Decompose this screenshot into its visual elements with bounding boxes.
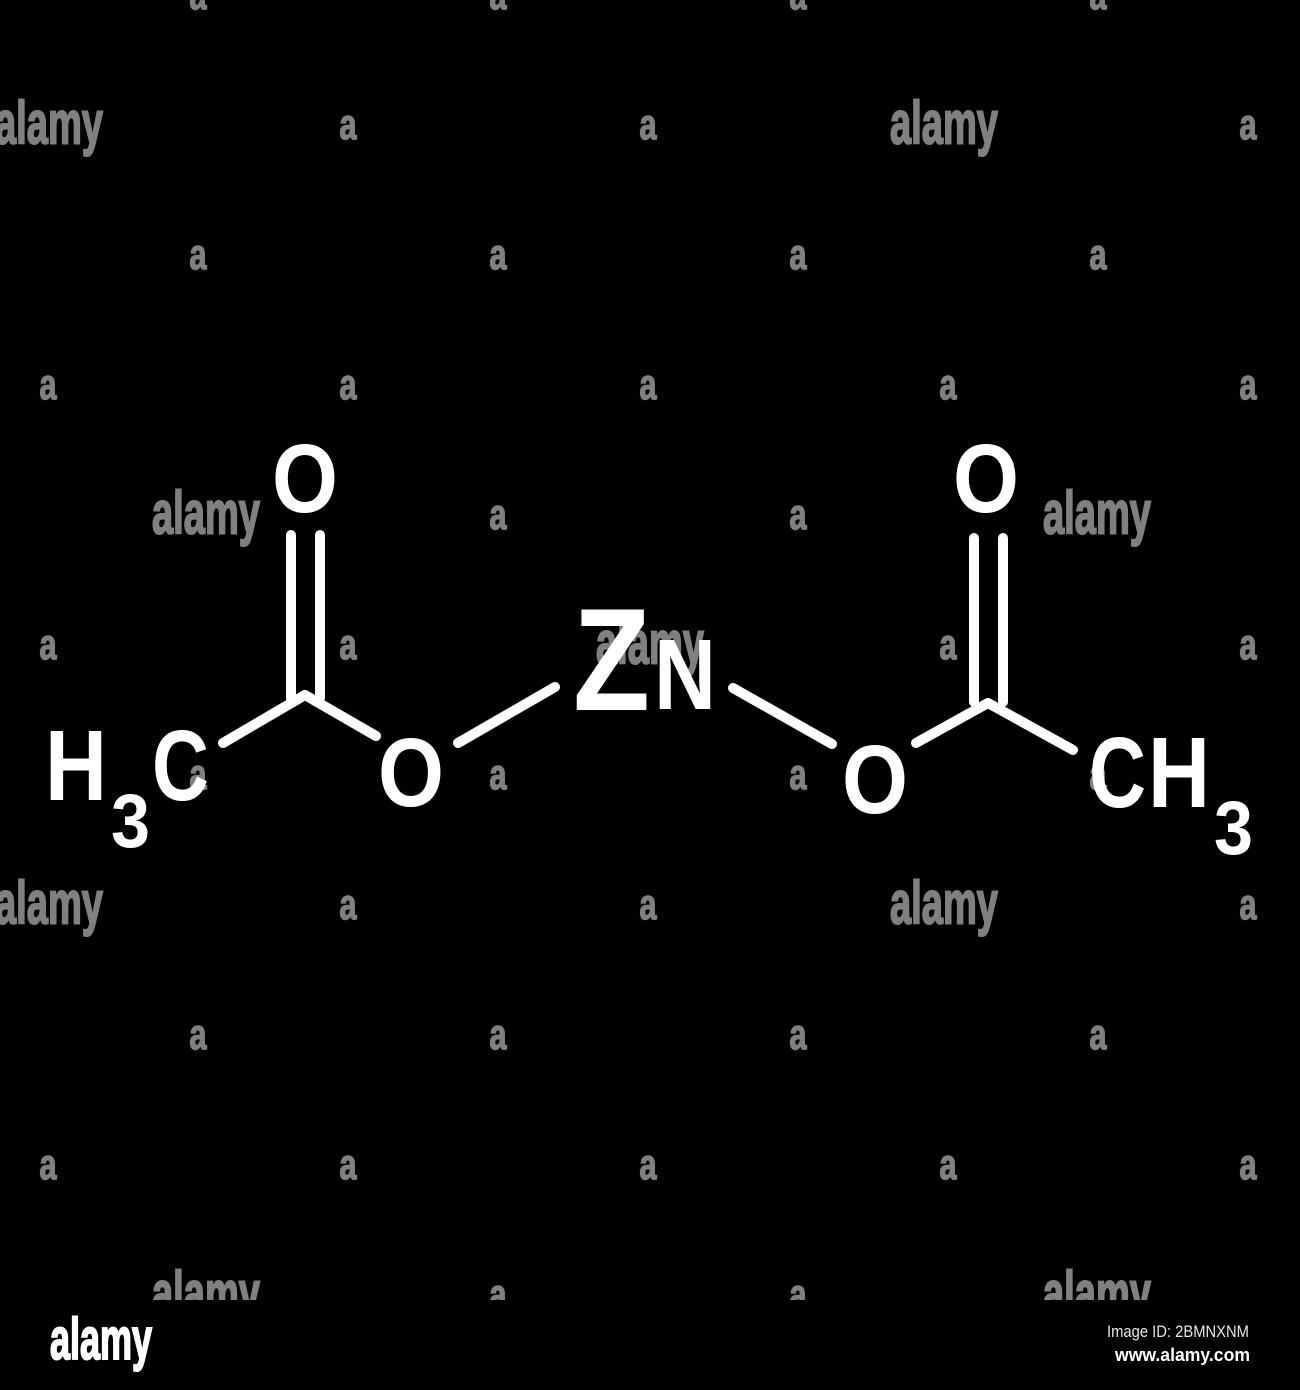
watermark pattern: alamy (0, 90, 103, 156)
watermark pattern: a (490, 491, 507, 539)
watermark pattern: alamy (152, 480, 260, 546)
bond: oxygen to zinc (458, 687, 555, 743)
watermark pattern: a (40, 1141, 57, 1189)
watermark pattern: a (1240, 881, 1257, 929)
atom: bridging oxygen left: O (378, 718, 444, 827)
bond: carbon to oxygen left (305, 695, 376, 736)
watermark pattern: a (1090, 751, 1107, 799)
footer logo: alamy (50, 1307, 152, 1372)
watermark pattern: a (190, 1011, 207, 1059)
zinc label (573, 578, 716, 741)
double bond right (974, 538, 1003, 702)
left acetate group (45, 424, 444, 864)
watermark pattern: a (190, 751, 207, 799)
watermark pattern: a (1240, 101, 1257, 149)
watermark pattern: a (790, 491, 807, 539)
right acetate group (842, 424, 1253, 871)
watermark pattern: a (940, 621, 957, 669)
label: H3C left: 3 (111, 779, 150, 864)
watermark pattern: a (340, 621, 357, 669)
atom: top oxygen left: O (272, 424, 338, 533)
watermark pattern: a (340, 361, 357, 409)
watermark pattern: a (1240, 1141, 1257, 1189)
bond: carbon to methyl right (988, 703, 1073, 750)
bond: methyl to carbon left (223, 695, 305, 743)
watermark pattern: alamy (890, 90, 998, 156)
watermark pattern: a (940, 361, 957, 409)
label: CH3 right (1089, 717, 1253, 871)
watermark pattern: a (640, 1141, 657, 1189)
label: CH3 right: C (1089, 717, 1146, 829)
bond: zinc to oxygen (733, 688, 832, 744)
watermark pattern: a (340, 1141, 357, 1189)
label: H3C left: H (45, 710, 107, 822)
watermark pattern: a (1090, 231, 1107, 279)
footer image id: Image ID: 2BMNXNM (1107, 1322, 1249, 1341)
watermark pattern: alamy (1043, 480, 1151, 546)
watermark pattern: a (790, 231, 807, 279)
watermark pattern: a (640, 101, 657, 149)
label: CH3 right: H (1148, 717, 1210, 829)
watermark pattern: a (340, 881, 357, 929)
bond: oxygen to carbon right (916, 703, 988, 743)
watermark pattern: a (790, 1011, 807, 1059)
watermark pattern: a (190, 231, 207, 279)
atom: top oxygen right: O (953, 424, 1019, 533)
watermark pattern: a (790, 1271, 807, 1319)
watermark pattern: a (340, 101, 357, 149)
watermark pattern: alamy (1043, 1260, 1151, 1326)
watermark pattern: a (490, 1011, 507, 1059)
watermark pattern: a (490, 231, 507, 279)
watermark pattern: a (1240, 621, 1257, 669)
watermark pattern: a (790, 751, 807, 799)
watermark pattern: alamy (890, 870, 998, 936)
watermark pattern: alamy (596, 610, 704, 676)
watermark pattern: a (640, 361, 657, 409)
footer url: www.alamy.com (1114, 1345, 1250, 1365)
watermark pattern: a (490, 751, 507, 799)
watermark pattern: a (1240, 361, 1257, 409)
watermark pattern: a (490, 1271, 507, 1319)
label: H3C left: C (152, 710, 209, 822)
watermark pattern: a (40, 621, 57, 669)
atom: bridging oxygen right: O (842, 725, 908, 834)
zinc label: Z (573, 578, 650, 741)
watermark pattern: a (1090, 1011, 1107, 1059)
zinc label: N (654, 619, 716, 731)
watermark pattern: alamy (152, 1260, 260, 1326)
label: CH3 right: 3 (1214, 786, 1253, 871)
label: H3C left (45, 710, 209, 864)
double bond left (291, 535, 320, 698)
watermark pattern: alamy (0, 870, 103, 936)
watermark pattern: a (940, 1141, 957, 1189)
watermark pattern: a (40, 361, 57, 409)
watermark pattern: a (640, 881, 657, 929)
chemical structure: zinc acetate (45, 424, 1253, 871)
